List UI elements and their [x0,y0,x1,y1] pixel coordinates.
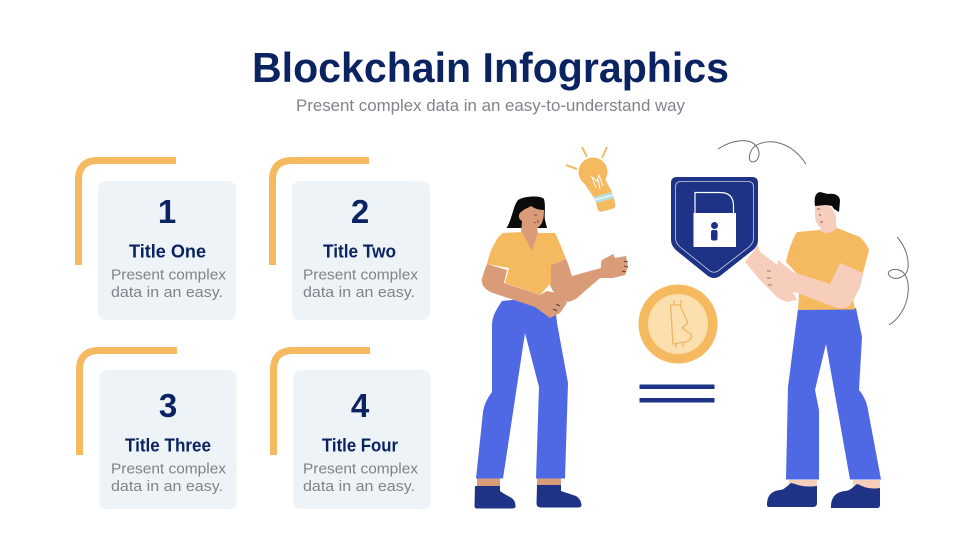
near arm and hand [482,264,567,318]
panel: card 2: Title Two [323,242,396,262]
face details [534,215,538,223]
panel: card 2: 2 [351,193,369,230]
shirt [487,232,566,295]
panel: card 4: 4 [351,387,370,424]
far arm [550,254,628,302]
icon: bitcoin coin [638,284,718,364]
panel: card 2 [272,160,430,320]
ankles [477,478,561,487]
neck and head [815,205,837,234]
panel: card 3: data in an easy. [111,478,223,495]
title: Blockchain Infographics [252,44,729,91]
panel: card 1: Present complex [111,266,227,284]
panel: card 2: data in an easy. [303,284,415,301]
hair [506,196,547,228]
equals lines [640,384,714,402]
subtitle: Present complex data in an easy-to-understand way [296,96,685,115]
hair [815,192,840,212]
panel: card 3: 3 [159,387,177,424]
icon: squiggle top [718,141,806,164]
shoes [474,485,582,508]
panel: card 1: 1 [158,193,176,230]
panel: card 4: Present complex [303,460,419,478]
finger lines [553,261,628,311]
panel: card 1: Title One [129,242,206,262]
far arm and hand [745,245,797,302]
ankles [789,480,880,490]
icon: squiggle right [888,237,908,325]
trousers [476,298,568,478]
panel: card 3: Title Three [125,436,211,456]
icon: shield with padlock [671,177,758,278]
woman figure [474,196,628,508]
near arm and hand [763,260,863,308]
trousers [786,308,881,480]
panel: card 1: data in an easy. [111,284,223,301]
man figure [745,192,881,508]
finger lines [767,271,772,285]
face details [817,209,823,222]
icon: light bulb [566,147,616,212]
panel: card 3 [80,350,237,509]
panel: card 4 [274,350,431,509]
shoes [767,483,880,508]
panel: card 2: Present complex [303,266,419,284]
shirt [786,228,869,310]
panel: card 3: Present complex [111,460,227,478]
panel: card 4: data in an easy. [303,478,415,495]
panel: card 4: Title Four [322,436,398,456]
face and neck [519,206,544,252]
panel: card 1 [78,160,236,320]
